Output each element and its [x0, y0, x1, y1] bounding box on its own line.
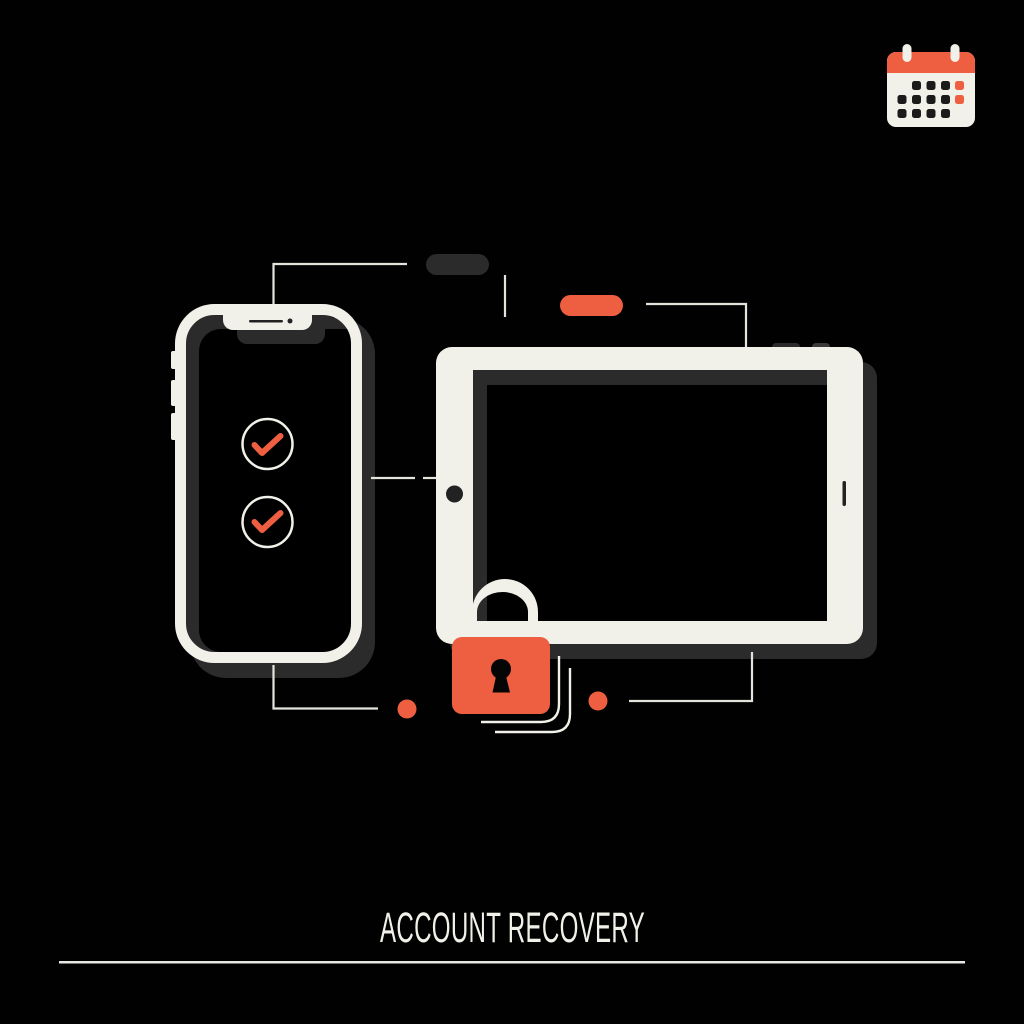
phone camera [288, 318, 292, 324]
tablet shadow [450, 362, 877, 659]
phone notch [223, 313, 312, 330]
title: ACCOUNT RECOVERY [380, 904, 645, 952]
connector: phone to tablet [371, 477, 436, 479]
icon: calendar [887, 44, 975, 127]
phone frame [180, 310, 356, 658]
tablet device [436, 343, 877, 659]
phone speaker [249, 320, 283, 322]
padlock keyhole [491, 659, 511, 692]
phone shadow [184, 312, 375, 678]
tablet screen [487, 385, 827, 621]
dot: left orange [398, 700, 416, 718]
check badge two [242, 497, 292, 547]
pill: dark status [426, 254, 489, 275]
tablet top buttons [772, 343, 830, 351]
phone side buttons [171, 351, 178, 440]
phone device [171, 310, 375, 678]
icon: padlock [452, 579, 550, 714]
connector: tablet to right orange dot [629, 652, 752, 701]
dot: right orange [588, 692, 608, 710]
connector: phone bottom to orange dot [274, 665, 378, 708]
padlock body [452, 637, 550, 714]
tablet side slot [842, 481, 846, 506]
tablet frame [436, 347, 863, 644]
connector: phone top to dark pill [274, 264, 407, 305]
title rule [59, 961, 965, 964]
motion lines around padlock [481, 656, 570, 732]
connector: short vertical line [504, 275, 506, 317]
phone notch shadow [237, 329, 325, 344]
tablet home button [446, 486, 463, 502]
check badge one [242, 419, 292, 469]
pill: orange status [560, 295, 623, 316]
connector: orange pill to tablet [646, 304, 746, 348]
phone screen [199, 329, 355, 652]
padlock shackle [472, 579, 538, 625]
